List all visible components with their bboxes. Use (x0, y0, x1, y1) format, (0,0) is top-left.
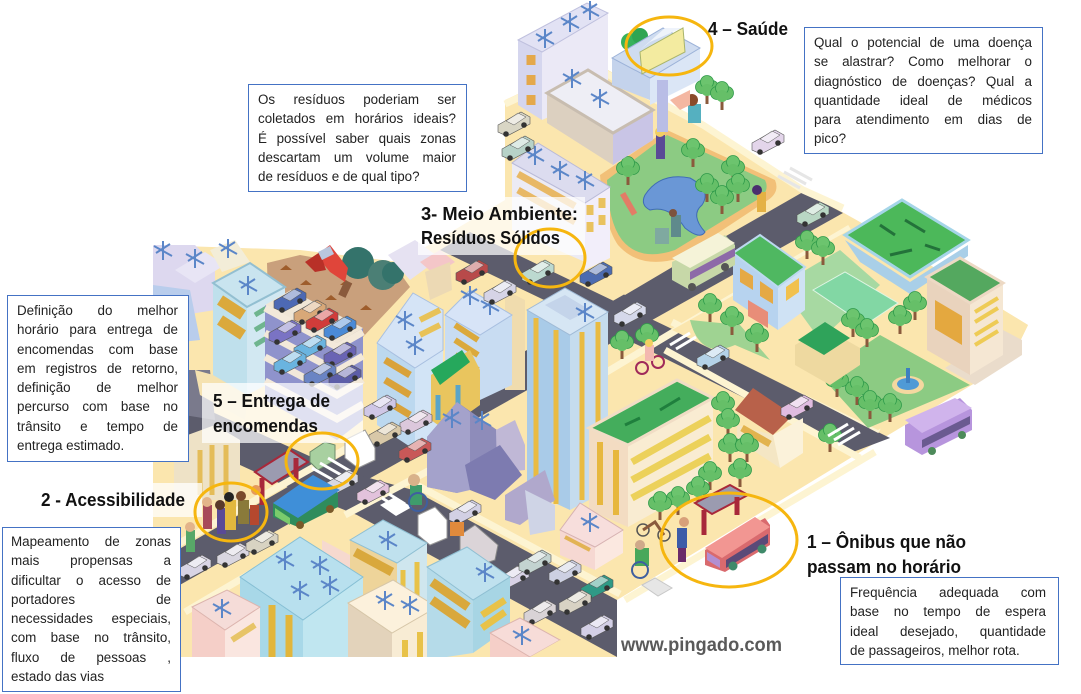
text box: saúde: Qual o potencial de uma doença (814, 35, 1032, 50)
cyclist and cars on road (497, 339, 813, 640)
label: 3 meio ambiente: 3- Meio Ambiente: (421, 203, 578, 224)
text box: acessibilidade: com base no trânsito, (11, 630, 171, 645)
middle blue buildings (377, 286, 525, 450)
vehicles near crossing (310, 395, 498, 565)
park trees (616, 76, 750, 214)
right block trees (610, 230, 926, 452)
label: 1 onibus: passam no horário (807, 556, 961, 577)
text box: encomendas: trânsito e tempo de (17, 419, 178, 434)
text box: ônibus: base no tempo de espera (850, 604, 1046, 619)
cream building (348, 580, 437, 660)
text box: resíduos: É possível saber quais zonas (258, 131, 456, 146)
text box: encomendas: percurso com base no (17, 399, 178, 414)
fountain (892, 368, 924, 394)
pond (643, 177, 705, 235)
text box: acessibilidade: fluxo de pessoas , (11, 650, 171, 665)
text box: saúde: para atendimento em dias de (814, 112, 1032, 127)
building: green roof platform (845, 200, 968, 294)
label: 5 entrega: 5 – Entrega de (213, 390, 330, 411)
watermark: www.pingado.com (620, 635, 782, 656)
left back buildings (153, 239, 250, 500)
ground (153, 60, 1028, 657)
blue bus and bus stop (255, 450, 340, 529)
translucent label panel: acessibilidade (153, 483, 202, 517)
purple house group (427, 402, 555, 535)
top park (600, 75, 776, 295)
group of people (185, 485, 261, 552)
text box: ônibus: de passageiros, melhor rota. (850, 643, 1020, 658)
text box: encomendas: horário para entrega de (17, 322, 178, 337)
text box: acessibilidade (2, 527, 181, 692)
top buildings (512, 1, 700, 270)
top cars and bus (498, 112, 829, 327)
text box: ônibus (840, 577, 1059, 665)
text box: resíduos: de resíduos e de qual tipo? (258, 169, 420, 184)
label: 4 saude: 4 – Saúde (708, 18, 788, 39)
brown dirt lot (267, 245, 410, 337)
text box: acessibilidade: estado das vias (11, 669, 104, 684)
parking structure (265, 288, 363, 440)
blue building with yellow windows (213, 263, 285, 395)
text box: ônibus: ideal desejado, quantidade (850, 624, 1046, 639)
park visitors (620, 94, 766, 244)
label: 1 onibus: 1 – Ônibus que não (807, 531, 966, 552)
text box: saúde: diagnóstico de doenças? Qual a (814, 74, 1032, 89)
lower-left cars (179, 530, 278, 580)
text box: encomendas: encomendas com base (17, 342, 178, 357)
hospital (612, 28, 700, 132)
text box: acessibilidade: dificultar o acesso de (11, 573, 171, 588)
text box: saúde: pico? (814, 131, 846, 146)
pink building (192, 590, 260, 660)
text box: encomendas: entrega estimado. (17, 438, 124, 453)
blue building front (427, 547, 510, 660)
central tower (527, 288, 608, 510)
pink corner building (490, 618, 590, 660)
label: 3 meio ambiente (421, 203, 578, 248)
text box: encomendas: em registros de retorno, (17, 361, 178, 376)
lower block trees (648, 392, 758, 520)
building: beige with green roof (927, 258, 1022, 385)
text box: resíduos: coletados em horários ideais? (258, 111, 456, 126)
label: 1 onibus (807, 531, 966, 577)
sidewalks (153, 65, 880, 612)
text box: acessibilidade: portadores de (11, 592, 171, 607)
parked cars (269, 288, 361, 390)
purple bus (905, 398, 972, 455)
low grey building (547, 69, 653, 165)
label: 2 acessibilidade: 2 - Acessibilidade (41, 489, 185, 510)
big light blue building (240, 537, 363, 660)
text box: acessibilidade: mais propensas a (11, 553, 171, 568)
text box: saúde: quantidade ideal de médicos (814, 93, 1032, 108)
translucent label panel: entrega (202, 383, 363, 443)
crossings (382, 168, 860, 508)
text box: resíduos (248, 84, 467, 192)
text box: encomendas: definição de melhor (17, 380, 178, 395)
text box: encomendas (7, 295, 189, 462)
red truck (305, 245, 348, 282)
blue building back (350, 520, 427, 612)
wheelchair user (632, 540, 649, 578)
text box: acessibilidade: necessidades especiais, (11, 611, 171, 626)
text box: encomendas: Definição do melhor (17, 303, 178, 318)
person waiting (677, 517, 689, 562)
highlight ellipses (195, 17, 797, 587)
text box: resíduos: Os resíduos poderiam ser (258, 92, 456, 107)
pink low building (560, 503, 623, 570)
label: 5 entrega (213, 390, 330, 436)
building: blue with green roof (733, 235, 805, 330)
roads (153, 192, 890, 657)
dark trees (338, 247, 404, 298)
parked bicycle (637, 522, 670, 541)
text box: saúde (804, 27, 1043, 154)
tall slab (518, 1, 608, 120)
green-yellow small building (795, 322, 860, 385)
translucent label panel: meio ambiente (418, 197, 585, 255)
bus olive (672, 233, 735, 291)
far buildings near label 3 (388, 240, 516, 305)
red roof house (735, 388, 803, 468)
green arched building (431, 350, 480, 430)
label: 3 meio ambiente: Resíduos Sólidos (421, 227, 560, 248)
tan building with stripes (174, 425, 240, 500)
text box: resíduos: descartam um volume maior (258, 150, 456, 165)
right block ground (672, 224, 1028, 430)
wheelchair user at crossing (408, 474, 427, 511)
text box: acessibilidade: Mapeamento de zonas (11, 534, 171, 549)
text box: saúde: se alastrar? Como melhorar o (814, 54, 1032, 69)
building beside park (512, 143, 610, 270)
bus stop and red bus (632, 485, 770, 596)
green roof building (589, 380, 713, 527)
text box: ônibus: Frequência adequada com (850, 585, 1046, 600)
label: 5 entrega: encomendas (213, 415, 318, 436)
lower buildings (192, 520, 590, 660)
